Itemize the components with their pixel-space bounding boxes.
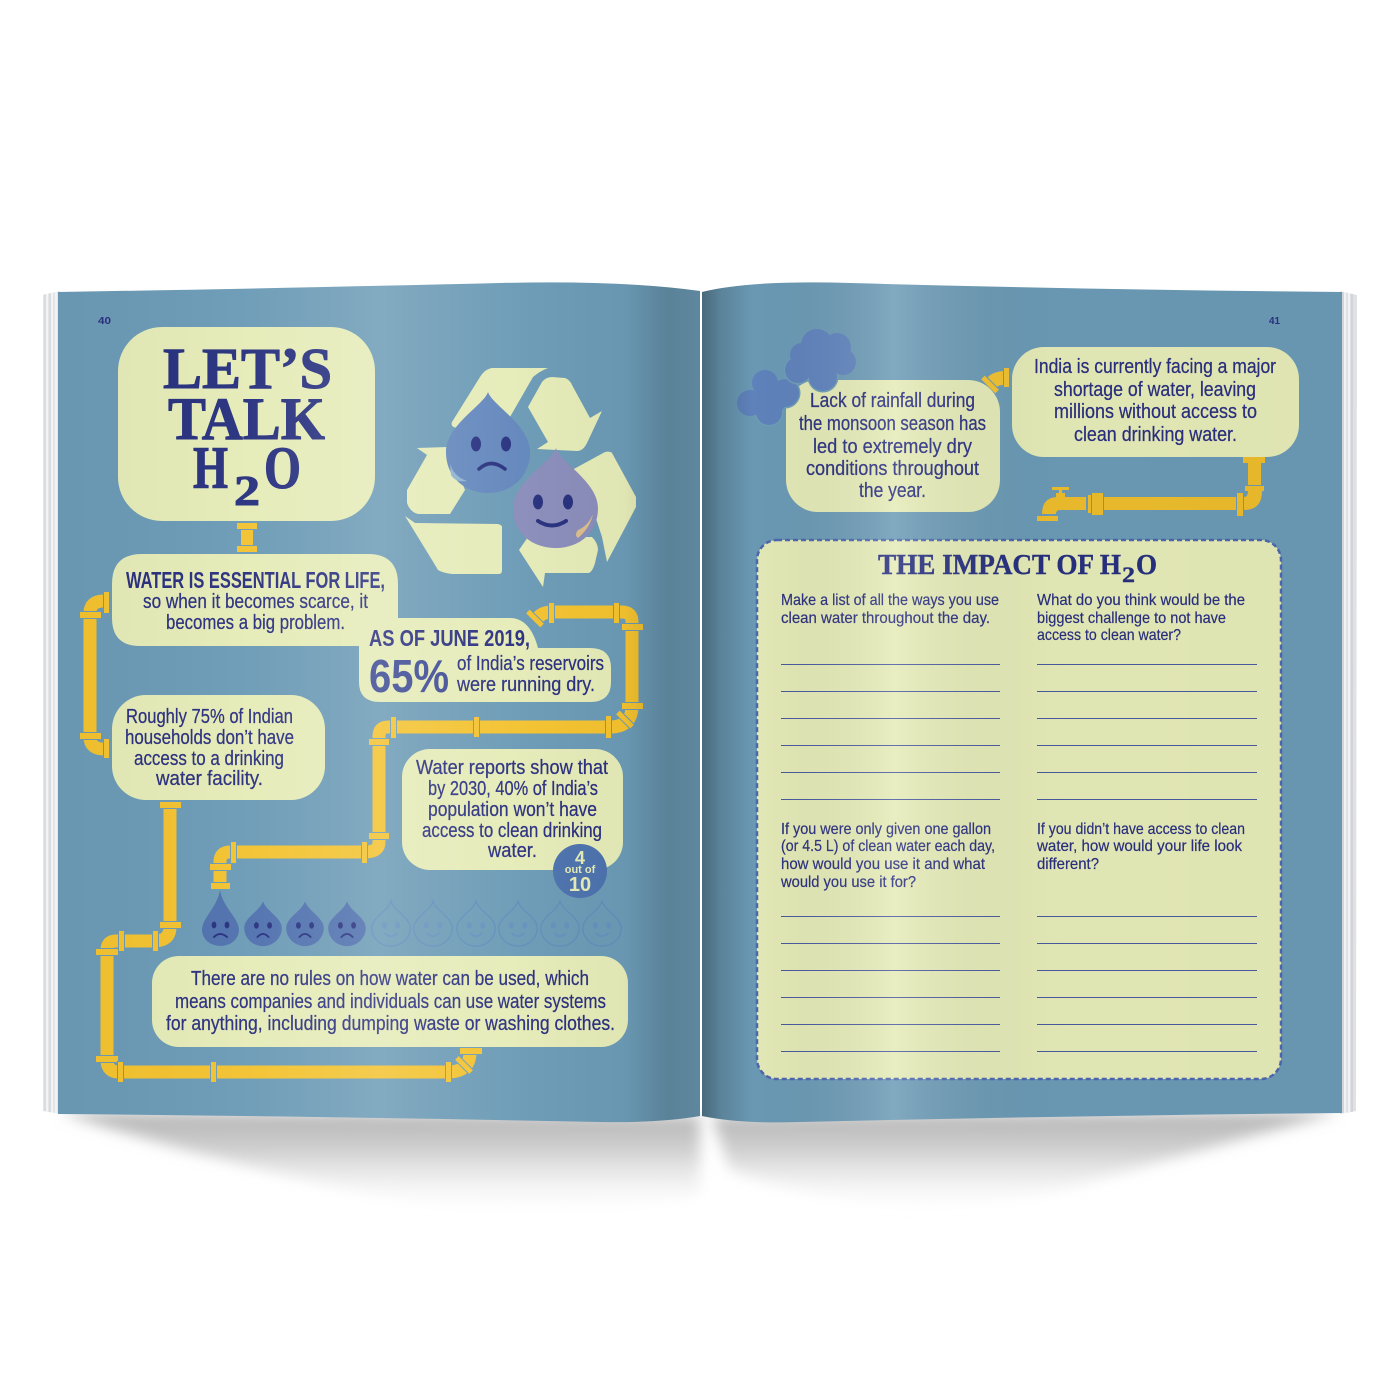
callout: water reports: by 2030, 40% of India’s [428,778,598,800]
title text: TALK [168,386,325,452]
page number 40: 40 [98,316,112,327]
callout: water is essential + reservoirs [112,554,611,702]
panel heading: O [1136,549,1157,581]
page number 41: 41 [1269,316,1280,327]
title text: 2 [234,469,260,515]
page edges: left stack [43,291,60,1114]
callout: lack of rainfall: led to extremely dry [813,436,972,458]
callout: India shortage: clean drinking water. [1074,424,1237,446]
reservoirs stat: 65% [369,650,449,702]
pipe: small top connector [981,368,1009,393]
callout: lack of rainfall: the year. [859,480,926,502]
page shadow: right [712,1112,1340,1204]
recycling symbol [405,368,636,587]
title text: O [264,435,301,501]
question 4 [1036,821,1257,1052]
callout: water reports [402,749,623,870]
callout: water reports: Water reports show that [416,757,608,779]
question 4: water, how would your life look [1036,838,1243,855]
badge: 4 out of 10 [553,844,607,898]
callout: households: Roughly 75% of Indian [126,706,293,728]
callout: water reports: population won’t have [428,799,597,821]
reservoirs stat: were running dry. [456,674,595,696]
page shadow: left [60,1112,700,1209]
question 1 [781,592,1000,800]
question 4: If you didn’t have access to clean [1037,821,1245,838]
left page background [58,282,700,1122]
question 2: access to clean water? [1037,627,1181,644]
badge: 4 out of 10: out of [565,864,596,876]
question 2 [1037,592,1257,800]
pipe: top right loop [210,603,643,889]
essential text [126,567,385,634]
panel: the impact of H2O [757,540,1281,1079]
essential text: so when it becomes scarce, it [143,591,368,613]
callout: India shortage: millions without access to [1054,401,1257,423]
panel heading: THE IMPACT OF H [878,549,1121,581]
icon: rain clouds [737,329,856,426]
reservoirs stat: of India’s reservoirs [457,653,604,675]
badge: 4 out of 10: 10 [569,874,591,896]
pipe: faucet [1037,457,1265,521]
question 3: would you use it for? [780,874,916,891]
callout: households [112,695,325,800]
question 4: different? [1037,856,1099,873]
right page background [702,282,1342,1122]
question 3 [780,821,1000,1052]
reservoirs stat [369,625,604,702]
title text: H [193,435,228,501]
question 1: clean water throughout the day. [781,610,990,627]
callout: households: access to a drinking [134,748,284,770]
callout: no rules: There are no rules on how water can be used, which [191,968,589,990]
essential text: WATER IS ESSENTIAL FOR LIFE, [126,567,385,593]
icon: sad water drop [446,392,530,493]
callout: water reports: water. [487,840,537,862]
title bubble [118,327,375,521]
callout: lack of rainfall: conditions throughout [806,458,979,480]
panel heading: 2 [1122,562,1135,587]
question 3: If you were only given one gallon [781,821,991,838]
question 2: What do you think would be the [1037,592,1245,609]
question 3: how would you use it and what [781,856,986,873]
callout: no rules [152,956,628,1047]
reservoirs stat: AS OF JUNE 2019, [369,625,530,651]
callout: lack of rainfall: Lack of rainfall during [810,390,975,412]
essential text: becomes a big problem. [166,612,345,634]
callout: lack of rainfall: the monsoon season has [799,413,986,435]
callout: no rules: for anything, including dumping waste or washing clothes. [166,1013,615,1035]
question 2: biggest challenge to not have [1037,610,1226,627]
page edges: right stack [1340,291,1357,1114]
callout: households: water facility. [155,768,263,790]
title text: LET’S [163,336,332,401]
pipe: lower loop [96,802,482,1082]
icon: happy water drop [513,448,598,548]
pictogram: water drops 4 of 10 [202,890,621,946]
question 3: (or 4.5 L) of clean water each day, [781,838,995,855]
callout: India shortage: shortage of water, leaving [1054,379,1256,401]
left page [58,282,700,1122]
badge: 4 out of 10: 4 [575,848,585,868]
title text [163,336,332,515]
left page shading [58,282,700,1122]
callout: no rules: means companies and individuals can use water systems [175,991,606,1013]
pipe: left loop [80,592,109,758]
callout: water reports: access to clean drinking [422,820,602,842]
callout: households: households don’t have [125,727,294,749]
callout: India shortage [1012,347,1299,457]
pipe: title connector [237,523,257,552]
callout: India shortage: India is currently facing a major [1034,356,1276,378]
question 1: Make a list of all the ways you use [781,592,999,609]
right page [702,282,1342,1122]
right page shading [702,282,1342,1122]
callout: lack of rainfall [786,380,1000,512]
